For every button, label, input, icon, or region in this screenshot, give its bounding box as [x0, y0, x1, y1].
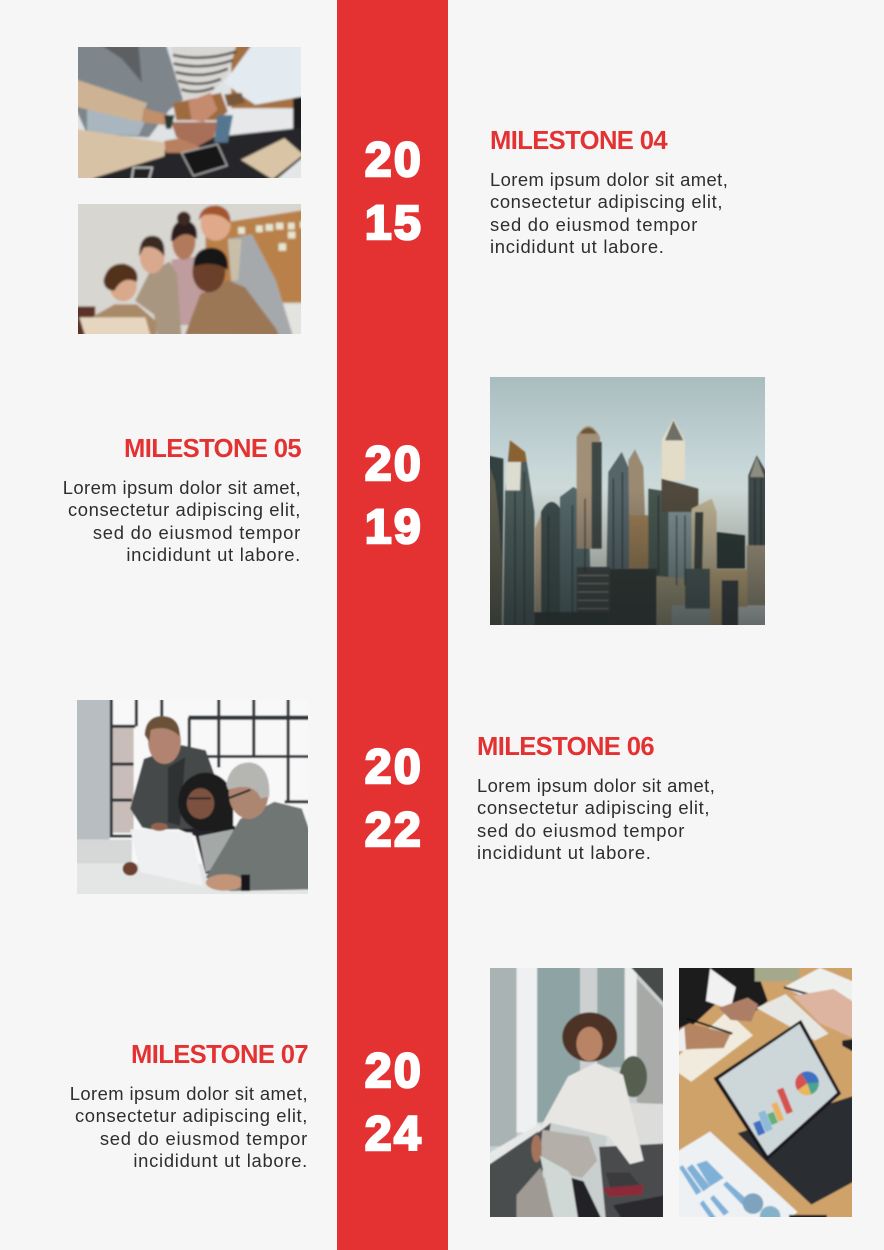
- red timeline band: [337, 0, 448, 1250]
- year 2019: 19: [365, 501, 423, 554]
- year 2015: [365, 134, 423, 250]
- milestone 04 text: Lorem ipsum dolor sit amet,: [490, 169, 728, 190]
- milestone 07 text: Lorem ipsum dolor sit amet,: [70, 1083, 308, 1104]
- milestone 05 text: sed do eiusmod tempor: [93, 522, 301, 543]
- milestone 05 text: consectetur adipiscing elit,: [68, 499, 301, 520]
- photo: city skyline: [490, 377, 765, 625]
- milestone 06 text: sed do eiusmod tempor: [477, 820, 685, 841]
- year 2022: 22: [365, 804, 423, 857]
- year 2022: [365, 741, 423, 857]
- year 2019: 20: [365, 438, 423, 491]
- photo: team around laptop: [78, 204, 301, 334]
- milestone 05 text: incididunt ut labore.: [126, 544, 301, 565]
- milestone 07 text: consectetur adipiscing elit,: [75, 1105, 308, 1126]
- milestone 04 text: sed do eiusmod tempor: [490, 214, 698, 235]
- year 2024: 24: [365, 1108, 423, 1161]
- year 2015: 15: [365, 197, 423, 250]
- year 2022: 20: [365, 741, 423, 794]
- year 2024: [365, 1045, 423, 1161]
- photo: three colleagues at laptop: [77, 700, 308, 894]
- milestone 07 text: incididunt ut labore.: [133, 1150, 308, 1171]
- milestone 06 text: [477, 733, 715, 863]
- year 2019: [365, 438, 423, 554]
- milestone 05 text: Lorem ipsum dolor sit amet,: [63, 477, 301, 498]
- photo: hands stacked: [78, 47, 301, 178]
- photo: tablet with charts on desk: [679, 968, 852, 1217]
- year 2015: 20: [365, 134, 423, 187]
- milestone 06 text: Lorem ipsum dolor sit amet,: [477, 775, 715, 796]
- milestone 04 text: MILESTONE 04: [490, 127, 667, 155]
- milestone 07 text: [70, 1041, 308, 1171]
- milestone 05 text: [63, 435, 301, 565]
- milestone 06 text: incididunt ut labore.: [477, 842, 652, 863]
- milestone 04 text: incididunt ut labore.: [490, 236, 665, 257]
- year 2024: 20: [365, 1045, 423, 1098]
- photo: woman by window: [490, 968, 663, 1217]
- milestone 04 text: consectetur adipiscing elit,: [490, 191, 723, 212]
- milestone 05 text: MILESTONE 05: [124, 435, 301, 463]
- milestone 06 text: consectetur adipiscing elit,: [477, 797, 710, 818]
- milestone 06 text: MILESTONE 06: [477, 733, 654, 761]
- milestone 07 text: sed do eiusmod tempor: [100, 1128, 308, 1149]
- milestone 04 text: [490, 127, 728, 257]
- milestone 07 text: MILESTONE 07: [131, 1041, 308, 1069]
